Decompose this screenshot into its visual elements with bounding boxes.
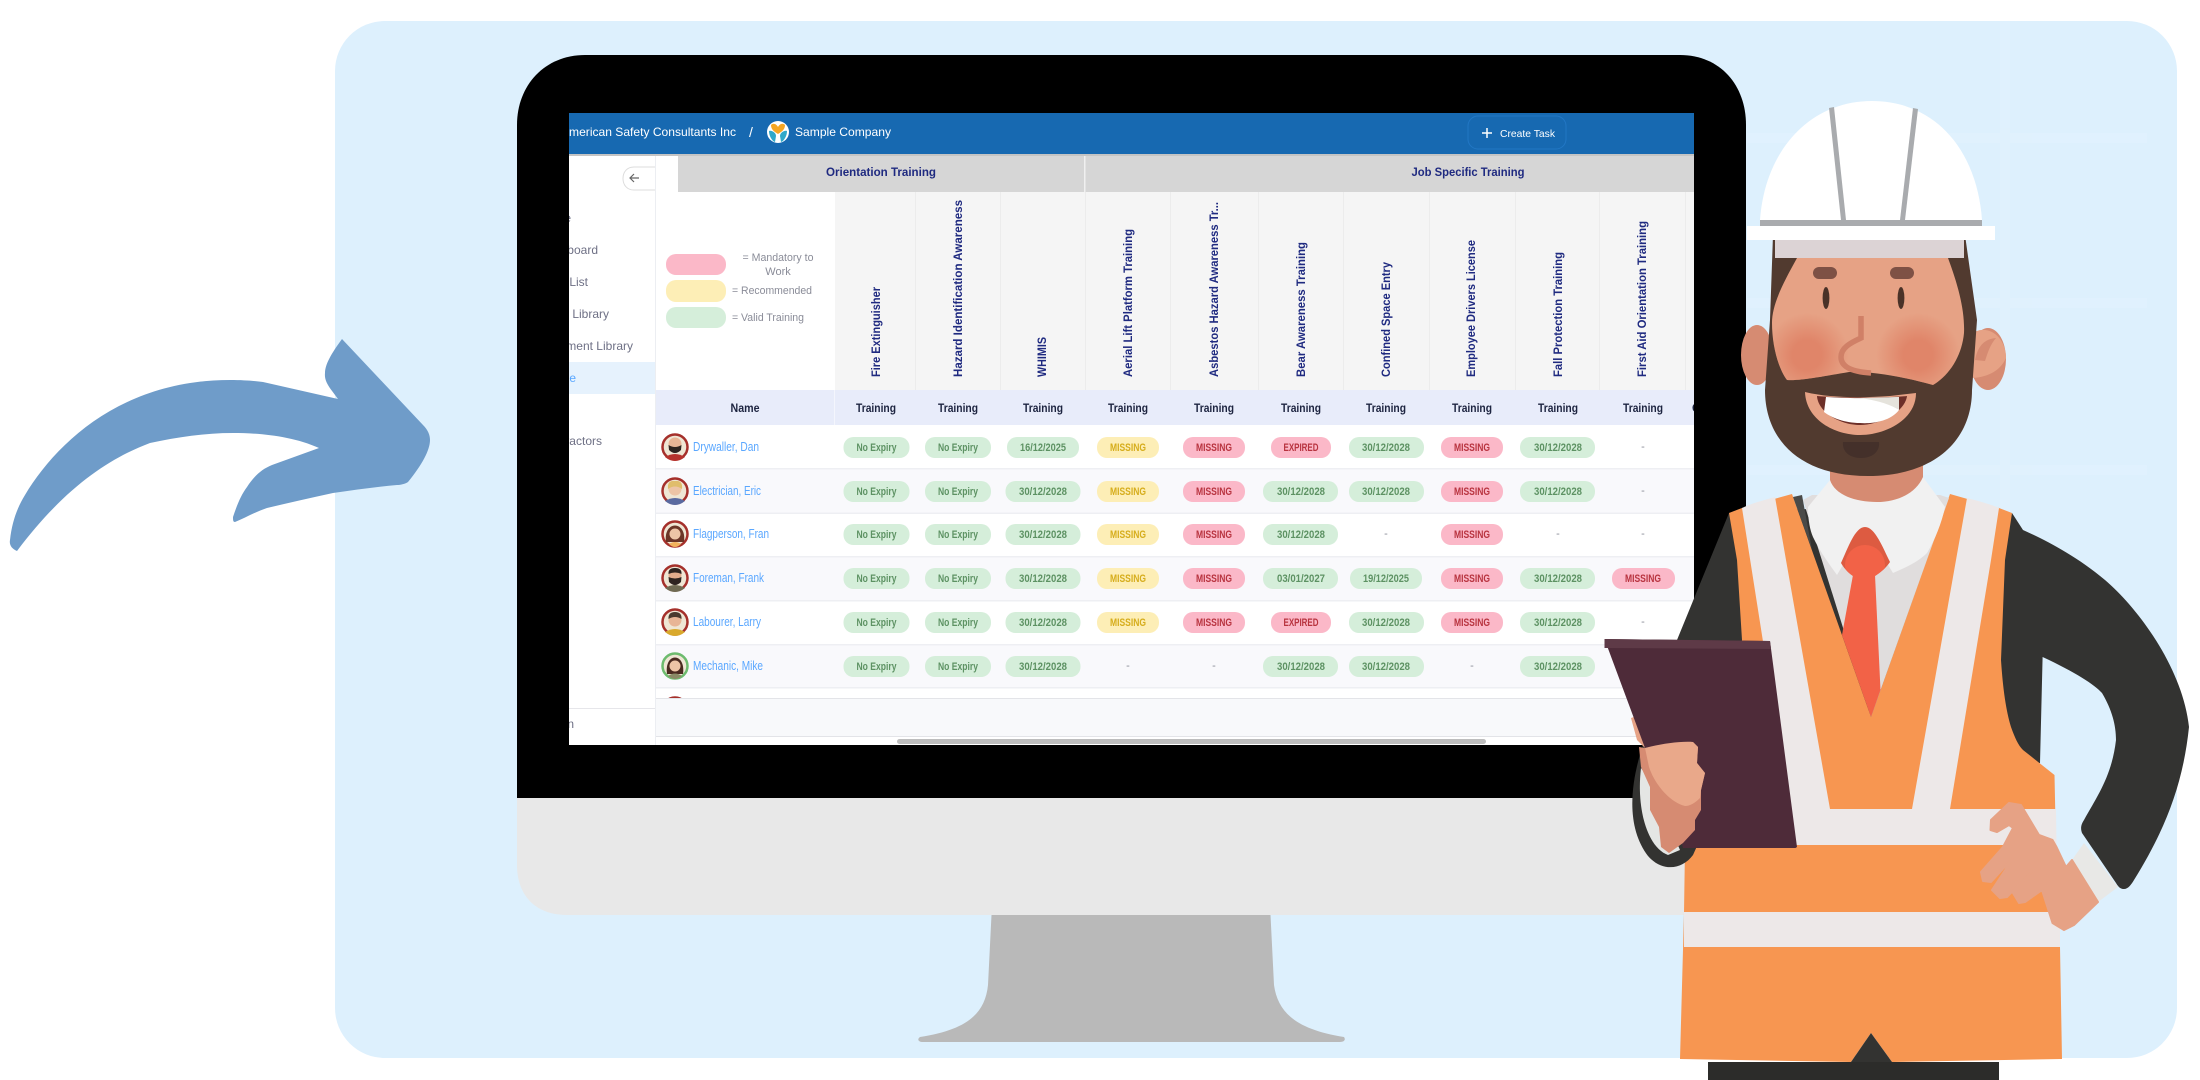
- row: Flagperson, Fran: No Expiry: [938, 529, 979, 541]
- rotated training column headers: Fall Protection Training: [1553, 252, 1565, 377]
- row: Electrician, Eric: 30/12/2028: [1277, 486, 1325, 498]
- legend: = Recommended: [732, 285, 812, 297]
- table header row: Training: [1023, 403, 1063, 415]
- rotated training column headers: Fire Extinguisher: [871, 286, 883, 377]
- left hand: [1639, 742, 1705, 853]
- category header band: Orientation Training: [826, 165, 936, 179]
- row: Flagperson, Fran: -: [1556, 528, 1560, 540]
- pants: [1708, 1050, 1999, 1080]
- row: Foreman, Frank: MISSING: [1625, 573, 1661, 585]
- beard and hair: [1765, 235, 1977, 476]
- rotated training column headers: Confined Space Entry: [1381, 261, 1393, 377]
- monitor stand: [918, 905, 1345, 1042]
- right hand on hip: [1981, 803, 2118, 930]
- row: Flagperson, Fran: MISSING: [1454, 529, 1490, 541]
- table header row: Training: [938, 403, 978, 415]
- jacket and right arm: [1677, 508, 2189, 889]
- row: Foreman, Frank: MISSING: [1454, 573, 1490, 585]
- shirt and collar: [1793, 477, 1949, 717]
- table header row: Training: [1281, 403, 1321, 415]
- tie: [1841, 527, 1890, 717]
- row: Mechanic, Mike: [656, 652, 1623, 688]
- row: Labourer, Larry: No Expiry: [938, 617, 979, 629]
- legend: [666, 252, 814, 328]
- row: Foreman, Frank: 30/12/2028: [1534, 573, 1582, 585]
- screen: training matrix app: [513, 113, 1700, 745]
- sidebar: [569, 156, 656, 745]
- row: Flagperson, Fran: 30/12/2028: [1019, 529, 1067, 541]
- notch: [1851, 1033, 1892, 1062]
- row: Flagperson, Fran: -: [1641, 528, 1645, 540]
- rotated training column headers: Hazard Identification Awareness: [953, 200, 965, 377]
- row: Drywaller, Dan: 30/12/2028: [1534, 442, 1582, 454]
- eyebrows and eyes: [1813, 267, 1914, 309]
- row: Flagperson, Fran: -: [1384, 528, 1388, 540]
- app header bar: /: [749, 124, 753, 140]
- sidebar: Compliance: [513, 371, 576, 385]
- face: [1772, 258, 1964, 385]
- row: Labourer, Larry: MISSING: [1454, 617, 1490, 629]
- row: Foreman, Frank: MISSING: [1196, 573, 1232, 585]
- ears: [1741, 325, 2006, 390]
- table header row: Training: [1366, 403, 1406, 415]
- row: Electrician, Eric: 30/12/2028: [1534, 486, 1582, 498]
- rotated training column headers: WHIMIS: [1037, 337, 1049, 377]
- table header row: Training: [856, 403, 896, 415]
- row: Mechanic, Mike: 30/12/2028: [1362, 661, 1410, 673]
- rotated training column headers: [835, 192, 1694, 390]
- row: Electrician, Eric: 30/12/2028: [1362, 486, 1410, 498]
- arrow pointing to monitor: [10, 339, 430, 551]
- row: Electrician, Eric: MISSING: [1454, 486, 1490, 498]
- neck: [1830, 460, 1923, 502]
- row: Electrician, Eric: [656, 477, 1694, 514]
- legend: = Valid Training: [732, 312, 804, 324]
- row: Electrician, Eric: Electrician, Eric: [693, 484, 761, 498]
- sidebar: Employee List: [513, 275, 589, 289]
- row: Mechanic, Mike: 30/12/2028: [1019, 661, 1067, 673]
- row: Electrician, Eric: -: [1641, 485, 1645, 497]
- row: Foreman, Frank: No Expiry: [856, 573, 897, 585]
- row: Labourer, Larry: MISSING: [1110, 617, 1146, 629]
- row: Drywaller, Dan: EXPIRED: [1284, 442, 1319, 454]
- row: Labourer, Larry: [656, 608, 1644, 646]
- table footer and scrollbar: [656, 698, 1694, 745]
- legend: = Mandatory to: [742, 252, 814, 264]
- monitor body: [517, 55, 1746, 915]
- rotated training column headers: Asbestos Hazard Awareness Tr...: [1209, 202, 1221, 377]
- sidebar: Forms Library: [535, 307, 609, 321]
- legend: Work: [765, 266, 791, 278]
- row: Mechanic, Mike: Mechanic, Mike: [693, 659, 763, 673]
- character: construction safety supervisor: [1604, 101, 2189, 1080]
- sidebar: Subcontractors: [521, 434, 602, 448]
- row: Flagperson, Fran: 30/12/2028: [1277, 529, 1325, 541]
- row: Flagperson, Fran: Flagperson, Fran: [693, 527, 769, 541]
- row: Drywaller, Dan: Drywaller, Dan: [693, 440, 759, 454]
- left arm loop and cuff: [1631, 715, 1702, 867]
- rotated training column headers: Employee Drivers License: [1466, 240, 1478, 377]
- row: Mechanic, Mike: 30/12/2028: [1277, 661, 1325, 673]
- app header bar: [561, 113, 1694, 156]
- table header row: [656, 390, 1700, 425]
- row: Drywaller, Dan: [656, 433, 1694, 470]
- row: Drywaller, Dan: No Expiry: [856, 442, 897, 454]
- row: Mechanic, Mike: -: [1470, 660, 1474, 672]
- row: Foreman, Frank: 03/01/2027: [1277, 573, 1325, 585]
- row: Labourer, Larry: MISSING: [1196, 617, 1232, 629]
- row: Electrician, Eric: MISSING: [1110, 486, 1146, 498]
- rotated training column headers: Bear Awareness Training: [1296, 242, 1308, 377]
- rotated training column headers: Aerial Lift Platform Training: [1123, 229, 1135, 377]
- rotated training column headers: First Aid Orientation Training: [1637, 221, 1649, 377]
- row: Electrician, Eric: No Expiry: [856, 486, 897, 498]
- row: Flagperson, Fran: MISSING: [1196, 529, 1232, 541]
- table header row: Training: [1194, 403, 1234, 415]
- row: Foreman, Frank: Foreman, Frank: [693, 571, 765, 585]
- row: Mechanic, Mike: -: [1641, 660, 1645, 672]
- nose: [1841, 316, 1871, 373]
- row: Foreman, Frank: 19/12/2025: [1363, 573, 1409, 585]
- hard hat: [1747, 101, 1995, 258]
- row: Mechanic, Mike: -: [1126, 660, 1130, 672]
- app header bar: American Safety Consultants Inc: [561, 125, 736, 139]
- table header row: Name: [730, 403, 760, 415]
- clipboard: [1604, 639, 1797, 848]
- row: Labourer, Larry: EXPIRED: [1284, 617, 1319, 629]
- row: Drywaller, Dan: 16/12/2025: [1020, 442, 1066, 454]
- table header row: Training: [1538, 403, 1578, 415]
- row: Flagperson, Fran: No Expiry: [856, 529, 897, 541]
- row: Labourer, Larry: 30/12/2028: [1362, 617, 1410, 629]
- row: Electrician, Eric: MISSING: [1196, 486, 1232, 498]
- table header row: C: [1692, 403, 1700, 415]
- row: Electrician, Eric: 30/12/2028: [1019, 486, 1067, 498]
- row: Flagperson, Fran: MISSING: [1110, 529, 1146, 541]
- row: Foreman, Frank: 30/12/2028: [1019, 573, 1067, 585]
- row: Labourer, Larry: No Expiry: [856, 617, 897, 629]
- vest: [1680, 494, 2062, 1062]
- row: Mechanic, Mike: -: [1212, 660, 1216, 672]
- row: Labourer, Larry: -: [1641, 616, 1645, 628]
- row: Drywaller, Dan: MISSING: [1454, 442, 1490, 454]
- row: Foreman, Frank: MISSING: [1110, 573, 1146, 585]
- row: Foreman, Frank: [656, 564, 1694, 602]
- row: Foreman, Frank: No Expiry: [938, 573, 979, 585]
- row: Labourer, Larry: 30/12/2028: [1019, 617, 1067, 629]
- row: Labourer, Larry: 30/12/2028: [1534, 617, 1582, 629]
- table header row: Training: [1452, 403, 1492, 415]
- row: Drywaller, Dan: 30/12/2028: [1362, 442, 1410, 454]
- category header band: Job Specific Training: [1412, 165, 1524, 179]
- table header row: Training: [1108, 403, 1148, 415]
- row: Electrician, Eric: No Expiry: [938, 486, 979, 498]
- row: Mechanic, Mike: No Expiry: [856, 661, 897, 673]
- vest reflective stripes: [1684, 497, 2060, 947]
- row: Labourer, Larry: Labourer, Larry: [693, 615, 762, 629]
- sidebar: Dashboard: [539, 243, 598, 257]
- mouth: [1805, 392, 1916, 458]
- row: Flagperson, Fran: [656, 520, 1694, 558]
- app header bar: Create Task: [1500, 128, 1556, 140]
- app header bar: Sample Company: [795, 125, 891, 139]
- row: Mechanic, Mike: 30/12/2028: [1534, 661, 1582, 673]
- row: Drywaller, Dan: MISSING: [1110, 442, 1146, 454]
- row: Drywaller, Dan: -: [1641, 441, 1645, 453]
- category header band: [678, 156, 1694, 192]
- row: Mechanic, Mike: No Expiry: [938, 661, 979, 673]
- row: Drywaller, Dan: MISSING: [1196, 442, 1232, 454]
- sidebar: Home: [539, 211, 571, 225]
- row: Drywaller, Dan: No Expiry: [938, 442, 979, 454]
- table header row: Training: [1623, 403, 1663, 415]
- sidebar: Sign: [550, 717, 574, 731]
- sidebar: Document Library: [538, 339, 633, 353]
